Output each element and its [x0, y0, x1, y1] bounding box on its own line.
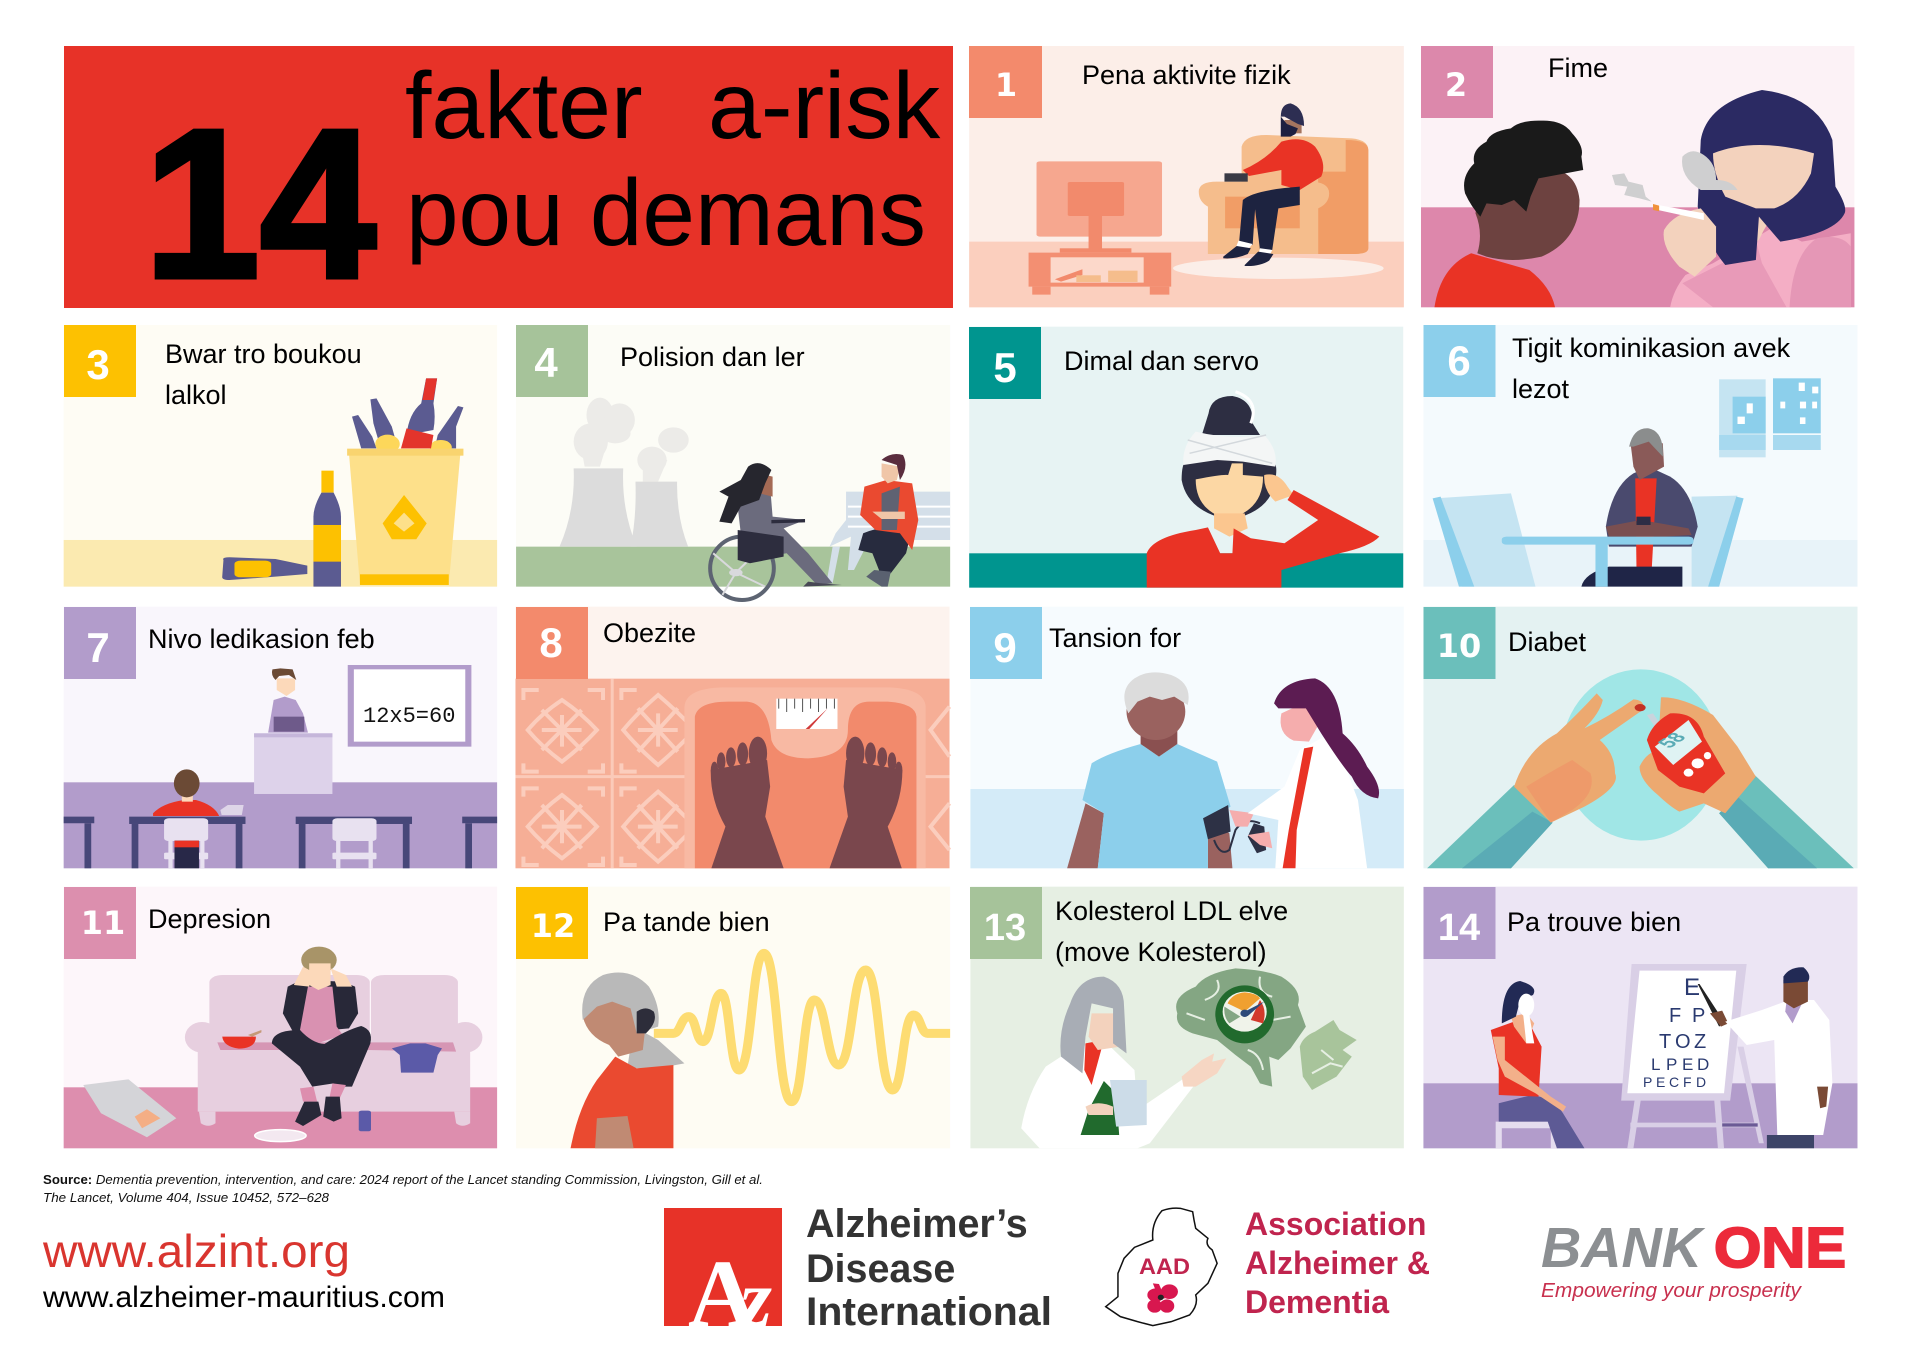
number badge 12 — [516, 887, 588, 959]
title number 14: 14 — [144, 85, 376, 322]
illustration: man in armchair watching television — [969, 46, 1404, 307]
panel 9: high blood pressure — [970, 607, 1404, 868]
eye chart letters: C — [1669, 1074, 1679, 1090]
number badge 2: 2 — [1445, 66, 1467, 104]
logo: Alzheimer's Disease International: Alzheimer’s — [806, 1202, 1028, 1246]
website links — [42, 1225, 445, 1314]
number badge 1: 1 — [995, 66, 1017, 104]
AAD mark: AAD — [1139, 1254, 1190, 1279]
panel 8: obesity — [515, 607, 950, 868]
panel 12: hearing loss — [516, 887, 950, 1148]
illustration: woman with bandaged head — [969, 327, 1403, 588]
number badge 3 — [64, 325, 136, 397]
eye chart letters: L — [1651, 1055, 1660, 1074]
label 13 — [1055, 896, 1288, 967]
logo: Alzheimer's Disease International: A — [688, 1240, 757, 1347]
illustration: depressed person on sofa — [64, 887, 497, 1148]
title line 1 — [405, 53, 941, 159]
number badge 6 — [1424, 325, 1496, 397]
title banner — [64, 46, 953, 322]
number badge 14 — [1424, 887, 1496, 959]
panel 5: head injury — [969, 327, 1403, 588]
panel 14: vision loss — [1423, 887, 1857, 1148]
label 12: Pa tande bien — [603, 907, 770, 937]
panel 1: physical inactivity — [969, 46, 1404, 307]
label 14: Pa trouve bien — [1507, 907, 1681, 937]
number badge 3: 3 — [86, 341, 110, 388]
organisation name: Association — [1245, 1206, 1426, 1242]
number badge 8: 8 — [539, 619, 563, 666]
eye chart letters: T — [1659, 1031, 1671, 1053]
panel 4: air pollution — [516, 325, 950, 600]
eye chart letters: Z — [1694, 1031, 1706, 1053]
illustration: doctor measuring blood pressure — [970, 607, 1404, 868]
organisation name: Alzheimer & — [1245, 1245, 1430, 1281]
eye chart letters: E — [1682, 1055, 1693, 1074]
eye chart letters: F — [1683, 1074, 1692, 1090]
number badge 12: 12 — [531, 907, 575, 945]
logo: Bank One — [1541, 1216, 1846, 1302]
number badge 11: 11 — [81, 904, 125, 942]
panel 7: low education — [64, 607, 497, 868]
number badge 9 — [970, 607, 1042, 679]
eye chart letters: E — [1656, 1074, 1665, 1090]
logo: Alzheimer's Disease International: Disease — [806, 1247, 955, 1291]
icon: Mauritius outline with hibiscus — [1106, 1208, 1217, 1326]
number badge 5 — [969, 327, 1041, 399]
panel 11: depression — [64, 887, 497, 1148]
panel 10: diabetes — [1423, 607, 1857, 868]
source citation: Source: Dementia prevention, intervention, and care: 2024 report of the Lancet standing Commission, Livingston, Gill et al. — [43, 1172, 763, 1187]
label 11: Depresion — [148, 904, 271, 934]
label 1: Pena aktivite fizik — [1082, 60, 1291, 90]
illustration: hands testing blood sugar — [1423, 607, 1857, 868]
panel 3: alcohol — [64, 325, 497, 587]
illustration: power plant towers with wheelchair user and seated person — [516, 325, 950, 600]
source citation — [43, 1172, 763, 1205]
illustration: woman smoking next to a man — [1421, 46, 1854, 307]
number badge 10 — [1424, 607, 1496, 679]
label 7: Nivo ledikasion feb — [148, 624, 375, 654]
number badge 4: 4 — [534, 339, 558, 386]
number badge 13 — [970, 887, 1042, 959]
title line 2: pou demans — [406, 160, 926, 266]
illustration: woman with hearing aid and sound wave — [516, 887, 950, 1148]
logo: Bank One: ONE — [1714, 1216, 1846, 1280]
number badge 8 — [516, 607, 588, 679]
eye chart letters: P — [1692, 1005, 1705, 1027]
logo: Association Alzheimer & Dementia — [1106, 1206, 1430, 1326]
label 8: Obezite — [603, 618, 696, 648]
eye chart letters: F — [1669, 1005, 1681, 1027]
eye chart letters: D — [1696, 1074, 1706, 1090]
label 3: Bwar tro boukou — [165, 339, 362, 369]
panel 13: LDL cholesterol — [970, 887, 1404, 1148]
label 4: Polision dan ler — [620, 342, 805, 372]
website links: www.alzheimer-mauritius.com — [42, 1281, 445, 1314]
panel 2: smoking — [1421, 46, 1854, 307]
eye chart letters: P — [1666, 1055, 1677, 1074]
number badge 10: 10 — [1437, 627, 1481, 665]
source citation: The Lancet, Volume 404, Issue 10452, 572–628 — [43, 1190, 330, 1205]
eye chart letters: O — [1675, 1031, 1691, 1053]
illustration: eye test with doctor and chart — [1423, 887, 1857, 1148]
label 6: lezot — [1512, 374, 1570, 404]
number badge 6: 6 — [1447, 337, 1471, 384]
organisation name: Dementia — [1245, 1284, 1389, 1320]
logo: Alzheimer's Disease International: International — [806, 1290, 1052, 1334]
number badge 7 — [64, 607, 136, 679]
panel 6: hearing / communication — [1423, 325, 1857, 587]
illustration: recycling bin with bottles — [64, 325, 497, 587]
label 3: lalkol — [165, 380, 227, 410]
logo: Alzheimer's Disease International — [664, 1208, 1050, 1326]
illustration: hands testing blood sugar: 58 — [1653, 730, 1692, 751]
label 9: Tansion for — [1049, 623, 1181, 653]
illustration: doctor with brain, gauge and heart — [970, 887, 1404, 1148]
number badge 11 — [64, 887, 136, 959]
organisation name — [1245, 1206, 1430, 1320]
label 5: Dimal dan servo — [1064, 346, 1259, 376]
website links: www.alzint.org — [42, 1225, 350, 1277]
number badge 13: 13 — [984, 907, 1026, 949]
label 10: Diabet — [1508, 627, 1587, 657]
eye chart letters: D — [1697, 1055, 1709, 1074]
label 2: Fime — [1548, 53, 1608, 83]
label 3 — [165, 339, 362, 410]
illustration: man at a table with chairs and window — [1423, 325, 1857, 587]
number badge 5: 5 — [993, 344, 1017, 391]
eye chart letters: E — [1684, 974, 1700, 1001]
number badge 1 — [969, 46, 1042, 118]
logo: Bank One: BANK — [1541, 1216, 1706, 1280]
label 6: Tigit kominikasion avek — [1512, 333, 1791, 363]
number badge 2 — [1421, 46, 1493, 118]
whiteboard equation: 12x5=60 — [363, 704, 455, 729]
illustration: feet on a weighing scale on tiled floor — [515, 607, 950, 868]
label 13: (move Kolesterol) — [1055, 937, 1267, 967]
number badge 7: 7 — [86, 624, 110, 671]
eye chart letters: P — [1643, 1074, 1652, 1090]
label 6 — [1512, 333, 1791, 404]
number badge 14: 14 — [1438, 907, 1480, 949]
number badge 4 — [516, 325, 588, 397]
logo: Bank One: Empowering your prosperity — [1541, 1280, 1802, 1302]
eye chart letters — [1643, 974, 1709, 1090]
number badge 9: 9 — [993, 624, 1017, 671]
illustration: classroom with teacher and student — [64, 607, 497, 868]
title line 1: a-risk — [708, 53, 941, 159]
label 13: Kolesterol LDL elve — [1055, 896, 1288, 926]
logo: Alzheimer's Disease International: z — [737, 1253, 772, 1344]
title line 1: fakter — [405, 53, 643, 159]
